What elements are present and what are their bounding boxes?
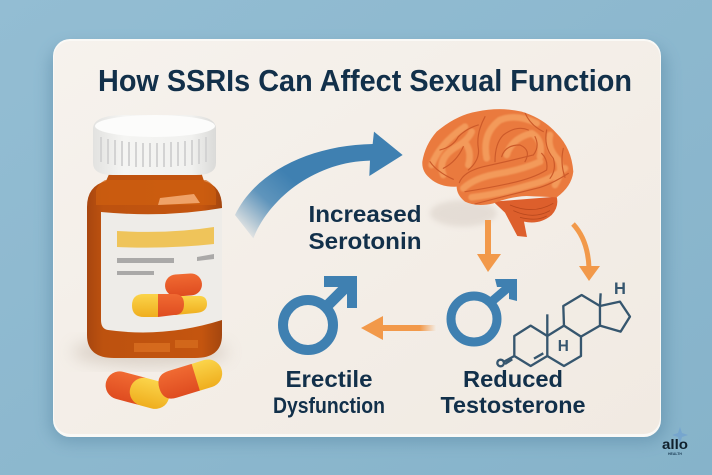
label: reduced testosterone <box>440 366 586 418</box>
label: erectile dysfunction <box>273 366 385 418</box>
sulci <box>430 113 568 204</box>
logo: allo health <box>662 427 688 456</box>
label: reduced testosterone: Reduced <box>463 366 563 392</box>
label: increased serotonin <box>308 201 422 254</box>
label: increased serotonin: Serotonin <box>308 228 422 254</box>
label: erectile dysfunction: Erectile <box>286 366 372 392</box>
panel: main card <box>50 39 666 442</box>
icon: brain <box>422 109 573 237</box>
arrow: brain to steroid <box>573 224 600 281</box>
label bar <box>117 227 214 248</box>
molecule upper H: H <box>614 280 626 298</box>
logo: allo health: allo <box>662 436 688 452</box>
cerebrum <box>422 109 573 205</box>
arrow: bottle to brain <box>235 132 403 238</box>
icon: steroid molecule <box>497 293 630 366</box>
icon: male symbol large <box>283 276 357 350</box>
label pills <box>132 273 207 317</box>
icon: male symbol small <box>451 279 517 342</box>
arrow: testosterone to dysfunction <box>361 316 436 340</box>
icon: pill bottle <box>72 115 228 412</box>
loose pill left <box>102 368 172 412</box>
label: erectile dysfunction: Dysfunction <box>273 393 385 418</box>
label: increased serotonin: Increased <box>308 201 422 227</box>
logo: allo health: HEALTH <box>668 452 682 456</box>
label: reduced testosterone: Testosterone <box>440 392 586 418</box>
arrow: brain to male symbol <box>477 220 501 272</box>
bottle cap <box>93 115 216 175</box>
label lines <box>117 254 214 275</box>
loose pill right <box>155 356 226 402</box>
molecule H labels: H <box>558 338 569 355</box>
gyri <box>432 117 565 197</box>
brainstem and cerebellum <box>493 197 557 237</box>
bottle body <box>87 172 222 358</box>
bottle label <box>101 208 222 332</box>
title: How SSRIs Can Affect Sexual Function <box>98 63 632 98</box>
